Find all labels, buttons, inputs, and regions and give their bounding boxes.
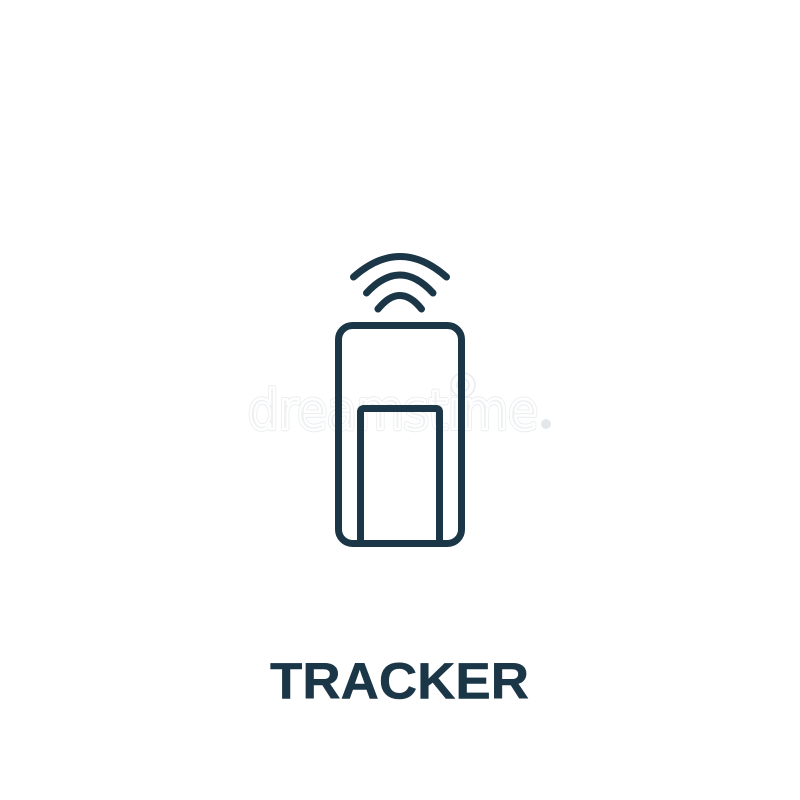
icon: signal waves — [354, 256, 446, 309]
watermark: dreamstime — [248, 379, 538, 442]
watermark: dreamstime — [248, 379, 538, 442]
title: TRACKER — [270, 652, 529, 710]
icon: device inner panel — [360, 408, 440, 543]
icon: device body — [338, 326, 462, 544]
icon: tracker device with signal — [338, 256, 462, 544]
